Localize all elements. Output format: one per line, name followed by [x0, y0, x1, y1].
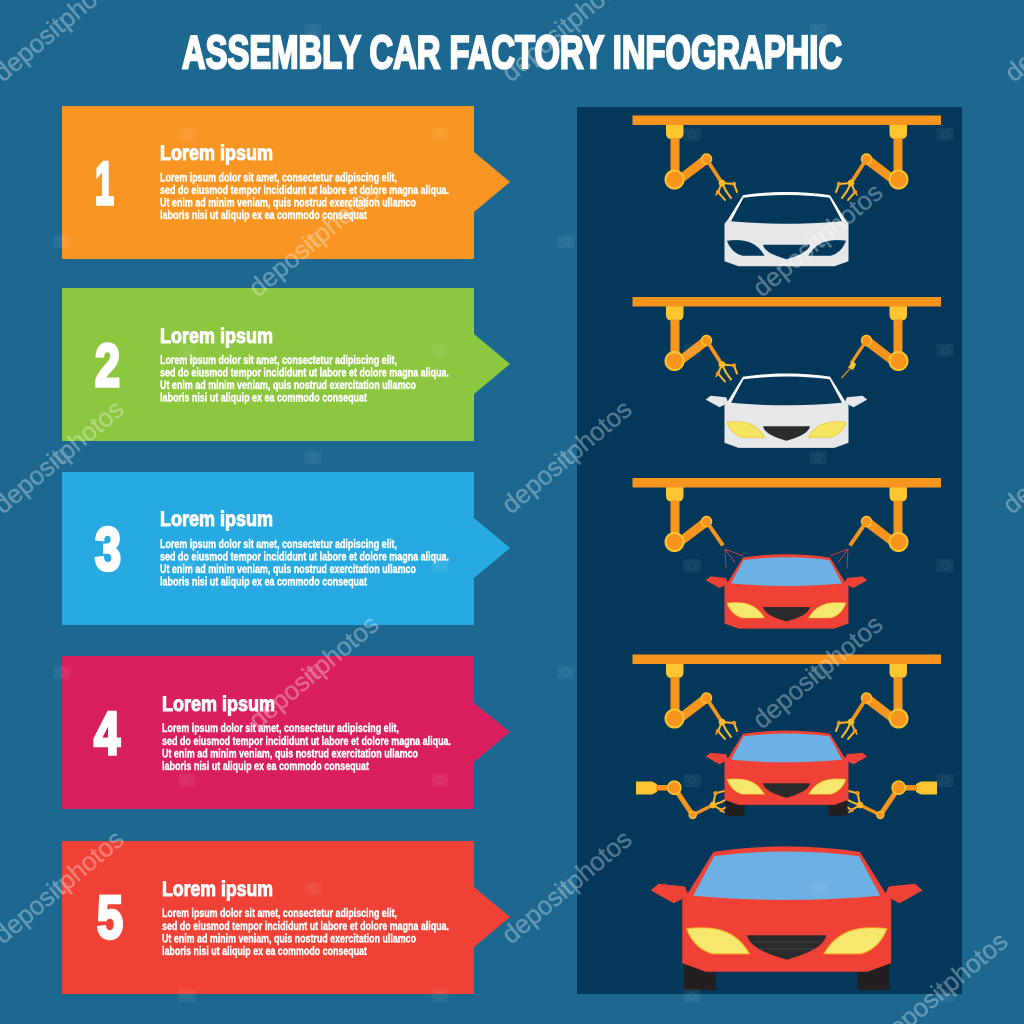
text block 3: laboris nisi ut aliquip ex ea commodo consequat [160, 576, 367, 588]
text block 1 [160, 172, 449, 222]
red car [706, 554, 867, 629]
robot arm right 2 [842, 306, 908, 378]
gantry rail 2 [632, 297, 941, 306]
heading 5: Lorem ipsum [162, 878, 273, 901]
panel: step 5 [62, 841, 510, 994]
banner shape 1 [62, 106, 510, 259]
text block 5: sed do eiusmod tempor incididunt ut labore et dolore magna aliqua. [162, 921, 449, 933]
panel: step 1 [62, 106, 510, 259]
station 4: wheels [632, 654, 941, 819]
text block 5: Lorem ipsum dolor sit amet, consectetur adipiscing elit, [162, 908, 397, 920]
panel: step 3 [62, 472, 510, 625]
paint spray right [830, 549, 848, 568]
car shell [724, 192, 848, 266]
text block 4: Lorem ipsum dolor sit amet, consectetur adipiscing elit, [162, 723, 399, 735]
robot arm left 1 [666, 125, 737, 200]
number 1: 1 [95, 150, 114, 217]
robot arm left 4 [666, 664, 737, 739]
text: depositphotos [243, 609, 384, 735]
heading 3: Lorem ipsum [160, 508, 273, 531]
banner shape 3 [62, 472, 510, 625]
text block 3: sed do eiusmod tempor incididunt ut labore et dolore magna aliqua. [160, 552, 449, 564]
robot arm left 3 [666, 488, 723, 551]
lower arm right [841, 781, 937, 819]
text block 1: Ut enim ad minim veniam, quis nostrud exercitation ullamco [160, 198, 416, 210]
text block 1: sed do eiusmod tempor incididunt ut labore et dolore magna aliqua. [160, 185, 449, 197]
text: depositphotos [747, 609, 888, 735]
station 2: white car [632, 297, 941, 448]
text: depositphotos [243, 177, 384, 303]
number 2: 2 [95, 332, 120, 399]
number 5: 5 [97, 884, 123, 951]
number 3: 3 [95, 516, 121, 583]
gantry rail 4 [632, 654, 941, 664]
red car with wheels [706, 731, 867, 816]
text block 1: laboris nisi ut aliquip ex ea commodo consequat [160, 210, 367, 222]
banner shape 2 [62, 288, 510, 441]
text block 2: laboris nisi ut aliquip ex ea commodo consequat [160, 392, 367, 404]
text block 5: Ut enim ad minim veniam, quis nostrud exercitation ullamco [162, 934, 416, 946]
white car [706, 374, 867, 448]
text block 4: Ut enim ad minim veniam, quis nostrud exercitation ullamco [162, 748, 418, 760]
station 1: body shell [632, 116, 941, 266]
text block 1: Lorem ipsum dolor sit amet, consectetur adipiscing elit, [160, 172, 397, 184]
panel: step 4 [62, 656, 510, 809]
robot arm right 3 [850, 488, 908, 551]
text block 3: Lorem ipsum dolor sit amet, consectetur adipiscing elit, [160, 539, 397, 551]
text: depositphotos [496, 824, 637, 950]
text block 3 [160, 539, 449, 588]
heading 4: Lorem ipsum [162, 693, 275, 716]
text block 5: laboris nisi ut aliquip ex ea commodo consequat [162, 946, 367, 958]
text block 2: sed do eiusmod tempor incididunt ut labore et dolore magna aliqua. [160, 368, 449, 380]
text: depositphotos [747, 177, 888, 303]
robot arm right 1 [836, 125, 908, 200]
text block 2: Ut enim ad minim veniam, quis nostrud exercitation ullamco [160, 380, 416, 392]
robot arm left 2 [666, 306, 737, 382]
station 3: paint [632, 478, 941, 629]
heading 2: Lorem ipsum [160, 325, 273, 348]
gantry rail 3 [632, 478, 941, 488]
paint spray left [725, 549, 743, 568]
text block 5 [162, 908, 449, 958]
number 4: 4 [94, 700, 120, 767]
panel: assembly line [577, 107, 962, 994]
text block 4: laboris nisi ut aliquip ex ea commodo consequat [162, 761, 369, 773]
text block 4 [162, 723, 451, 773]
text block 3: Ut enim ad minim veniam, quis nostrud exercitation ullamco [160, 564, 416, 576]
lower arm left [636, 781, 732, 819]
heading 1: Lorem ipsum [160, 142, 273, 165]
banner shape 5 [62, 841, 510, 994]
text block 2 [160, 355, 449, 404]
robot arm right 4 [836, 664, 908, 739]
station 5: finished car [651, 846, 923, 990]
text block 2: Lorem ipsum dolor sit amet, consectetur adipiscing elit, [160, 355, 397, 367]
panel background [577, 107, 962, 994]
text block 4: sed do eiusmod tempor incididunt ut labore et dolore magna aliqua. [162, 736, 451, 748]
banner shape 4 [62, 656, 510, 809]
panel: step 2 [62, 288, 510, 441]
text: depositphotos [496, 394, 637, 520]
gantry rail 1 [632, 116, 941, 125]
